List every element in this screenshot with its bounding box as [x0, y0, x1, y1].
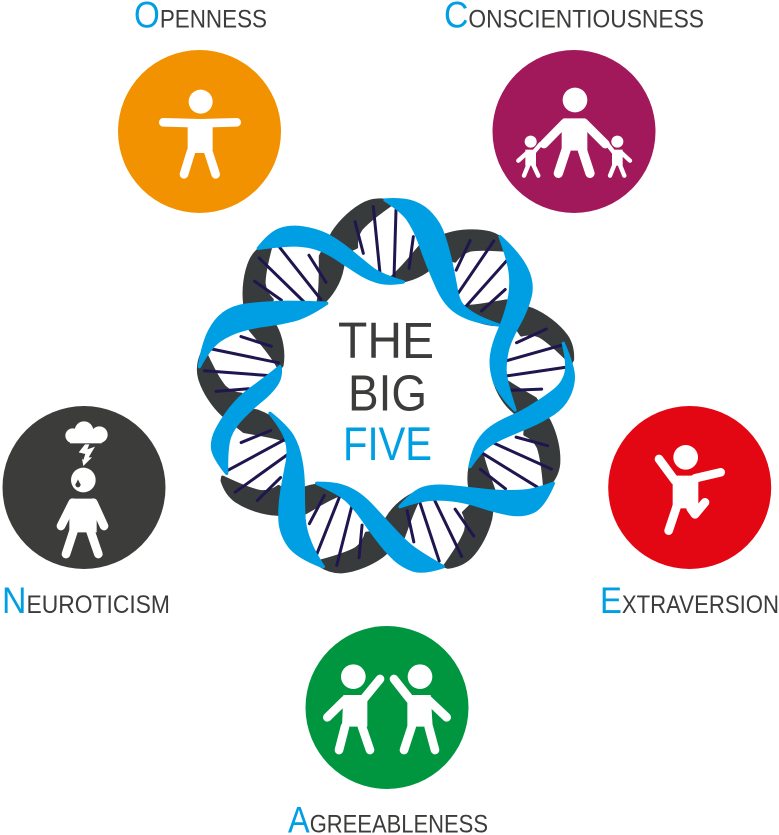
icon: figure with arms outstretched — [163, 90, 237, 174]
icon: two figures high-fiving — [327, 664, 447, 750]
centre title: THE — [338, 312, 434, 369]
circle: Openness — [118, 50, 281, 213]
blue strand — [199, 200, 573, 571]
icon: adult holding two children's hands — [518, 88, 630, 176]
circle: Conscientiousness — [492, 50, 656, 213]
icon: jumping figure — [659, 445, 721, 531]
base-pair rungs — [201, 207, 571, 572]
DNA ring — [188, 188, 583, 581]
label: Neuroticism: NEUROTICISM — [2, 580, 170, 621]
centre title: BIG — [348, 364, 427, 422]
circle: Extraversion — [608, 406, 771, 569]
icon: figure under storm cloud with teardrop — [61, 421, 108, 554]
circle: Neuroticism — [2, 406, 166, 569]
circle: Agreeableness — [306, 626, 468, 789]
centre title: FIVE — [343, 417, 432, 470]
centre title — [338, 312, 434, 470]
dark strand — [188, 188, 583, 581]
